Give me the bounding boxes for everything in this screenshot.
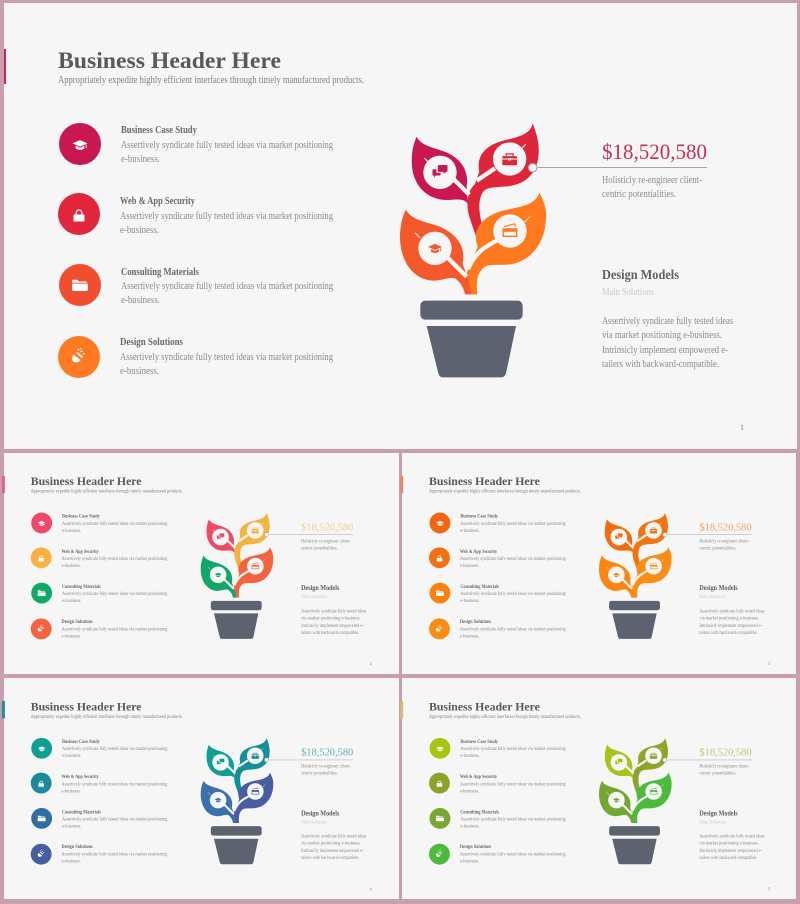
item: business case study: e-business. (460, 529, 480, 534)
design models heading: Design Models (301, 809, 340, 817)
item: consulting materials: e-business. (460, 599, 480, 604)
design models heading: Design Models (699, 584, 738, 592)
item: business case study: Assertively syndicate fully tested ideas via market positioning (460, 522, 566, 527)
plant in pot illustration (201, 513, 273, 639)
accent bar (4, 49, 6, 84)
item: web and app security (429, 547, 566, 569)
design models paragraph: via market positioning e-business. (602, 330, 722, 341)
price caption (602, 175, 702, 200)
item: design solutions: Design Solutions (460, 845, 491, 850)
item: consulting materials (59, 264, 333, 306)
price caption (301, 765, 351, 777)
main solutions subheading: Main Solutions (699, 595, 725, 600)
connector line (668, 759, 752, 761)
panel: slide 3 (402, 453, 796, 674)
slide 2 content (2, 476, 372, 666)
item: design solutions: Design Solutions (62, 620, 93, 625)
item: web and app security: Assertively syndicate fully tested ideas via market positioning (460, 783, 566, 788)
item: consulting materials: e-business. (62, 824, 81, 829)
item: design solutions: Assertively syndicate fully tested ideas via market positioning (460, 853, 566, 858)
title: Business Header Here (58, 48, 281, 73)
price caption (699, 765, 749, 777)
item: consulting materials (430, 583, 566, 604)
item: consulting materials: e-business. (62, 599, 81, 604)
item: web and app security: Web & App Security (460, 775, 498, 780)
item: design solutions: e-business. (460, 634, 479, 639)
item: consulting materials (430, 808, 566, 829)
item: consulting materials: Consulting Materials (460, 585, 499, 590)
item: consulting materials (31, 583, 168, 604)
design models paragraph: via market positioning e-business. (699, 842, 759, 847)
item: design solutions: e-business. (460, 860, 479, 865)
subtitle: Appropriately expedite highly efficient interfaces through timely manufactured products. (429, 715, 581, 720)
design models paragraph: Assertively syndicate fully tested ideas (699, 835, 765, 840)
accent bar (400, 476, 403, 493)
item: consulting materials: Assertively syndicate fully tested ideas via market positioning (460, 817, 566, 822)
item: business case study (31, 738, 168, 759)
design models heading: Design Models (699, 809, 738, 817)
design models paragraph: Intrinsicly implement empowered e- (301, 624, 364, 629)
item: business case study: Assertively syndicate fully tested ideas via market positioning (62, 522, 168, 527)
design models heading: Design Models (301, 584, 340, 592)
item: business case study: Assertively syndicate fully tested ideas via market positioning (460, 747, 566, 752)
item: consulting materials: Consulting Materials (62, 585, 101, 590)
item: design solutions: Design Solutions (120, 337, 183, 348)
item: design solutions: Design Solutions (460, 620, 491, 625)
panel: slide 5 (402, 678, 796, 899)
item: consulting materials: Assertively syndicate fully tested ideas via market positioning (460, 592, 566, 597)
item: design solutions (429, 618, 566, 639)
item: design solutions: e-business. (62, 634, 81, 639)
item: web and app security (58, 193, 333, 236)
item: design solutions: Design Solutions (62, 845, 93, 850)
item: web and app security: Web & App Security (120, 196, 195, 207)
item: design solutions: Assertively syndicate fully tested ideas via market positioning (460, 627, 566, 632)
item: design solutions (31, 844, 168, 865)
design models paragraph: tailers with backward-compatible. (699, 631, 758, 636)
design models heading: Design Models (602, 268, 679, 283)
item: design solutions (31, 618, 168, 639)
plant in pot illustration (599, 738, 672, 864)
design models paragraph: via market positioning e-business. (301, 842, 361, 847)
page number: 4 (370, 886, 372, 891)
design models paragraph (602, 316, 733, 370)
connector line (538, 166, 707, 168)
price caption: Holisticly re-engineer client- (602, 175, 702, 186)
main solutions subheading: Main Solutions (602, 287, 654, 298)
price caption: centric potentialities. (699, 772, 736, 777)
item: business case study (430, 738, 566, 759)
panel: slide 2 (4, 453, 399, 674)
price caption: Holisticly re-engineer client- (301, 765, 351, 770)
title: Business Header Here (429, 476, 540, 488)
design models paragraph (699, 609, 765, 636)
item: consulting materials: Assertively syndicate fully tested ideas via market positioning (121, 281, 333, 292)
item: web and app security: Web & App Security (62, 775, 99, 780)
main solutions subheading: Main Solutions (301, 820, 327, 825)
item: business case study (430, 513, 566, 534)
design models paragraph: tailers with backward-compatible. (699, 856, 758, 861)
price figure: $18,520,580 (602, 139, 707, 164)
price caption: centric potentialities. (301, 546, 338, 551)
connector line (269, 534, 353, 536)
slide 5 content (400, 701, 770, 891)
item: web and app security: Assertively syndicate fully tested ideas via market positioning (62, 557, 168, 562)
design models paragraph (699, 835, 765, 861)
title: Business Header Here (31, 701, 142, 713)
item: consulting materials: Assertively syndicate fully tested ideas via market positioning (62, 817, 168, 822)
subtitle: Appropriately expedite highly efficient interfaces through timely manufactured products. (31, 715, 183, 720)
page number: 1 (740, 423, 744, 432)
item: web and app security: Assertively syndicate fully tested ideas via market positioning (460, 557, 566, 562)
price caption: centric potentialities. (602, 189, 676, 200)
price caption (699, 539, 749, 551)
item: web and app security: Assertively syndicate fully tested ideas via market positioning (62, 783, 168, 788)
item: business case study (31, 513, 168, 534)
item: consulting materials: Consulting Materials (460, 810, 499, 815)
price caption: centric potentialities. (699, 546, 736, 551)
item: design solutions (429, 844, 566, 865)
accent bar (2, 476, 5, 493)
item: design solutions: e-business. (120, 366, 159, 377)
item: consulting materials: Assertively syndicate fully tested ideas via market positioning (62, 592, 168, 597)
item: business case study: Assertively syndicate fully tested ideas via market positioning (121, 140, 333, 151)
slide 1 content (4, 48, 744, 432)
item: web and app security: e-business. (120, 225, 159, 236)
accent bar (2, 701, 5, 718)
page number: 3 (768, 661, 770, 666)
plant in pot illustration (400, 123, 546, 377)
main solutions subheading: Main Solutions (301, 595, 327, 600)
item: consulting materials: Consulting Materials (62, 810, 101, 815)
panel: slide 4 (4, 678, 399, 899)
item: business case study: e-business. (460, 754, 480, 759)
connector line (269, 759, 353, 761)
item: web and app security: e-business. (460, 564, 479, 569)
item: business case study: Business Case Study (460, 515, 499, 520)
design models paragraph: Intrinsicly implement empowered e- (699, 624, 762, 629)
price caption: Holisticly re-engineer client- (699, 765, 749, 770)
item: business case study: Business Case Study (62, 740, 100, 745)
price figure: $18,520,580 (301, 521, 354, 533)
item: business case study (59, 123, 333, 165)
item: design solutions (58, 336, 333, 378)
item: design solutions: e-business. (62, 860, 81, 865)
subtitle: Appropriately expedite highly efficient interfaces through timely manufactured products. (31, 490, 183, 495)
design models paragraph: tailers with backward-compatible. (301, 631, 359, 636)
item: business case study: e-business. (62, 529, 81, 534)
item: web and app security: e-business. (62, 564, 81, 569)
item: business case study: Business Case Study (121, 125, 197, 136)
item: design solutions: Assertively syndicate fully tested ideas via market positioning (120, 352, 333, 363)
design models paragraph: Assertively syndicate fully tested ideas (699, 609, 765, 614)
subtitle: Appropriately expedite highly efficient interfaces through timely manufactured products. (58, 75, 364, 86)
price figure: $18,520,580 (699, 747, 752, 759)
design models paragraph: tailers with backward-compatible. (602, 359, 719, 370)
item: web and app security (31, 773, 168, 795)
plant in pot illustration (201, 738, 273, 864)
subtitle: Appropriately expedite highly efficient interfaces through timely manufactured products. (429, 490, 581, 495)
price caption: Holisticly re-engineer client- (699, 539, 749, 544)
price figure: $18,520,580 (699, 521, 752, 533)
accent bar (400, 701, 403, 718)
design models paragraph: Assertively syndicate fully tested ideas (602, 316, 733, 327)
title: Business Header Here (429, 701, 540, 713)
design models paragraph: via market positioning e-business. (699, 616, 759, 621)
item: web and app security (31, 547, 168, 569)
item: web and app security: e-business. (62, 790, 81, 795)
item: business case study: e-business. (62, 754, 81, 759)
item: business case study: Assertively syndicate fully tested ideas via market positioning (62, 747, 168, 752)
item: web and app security: Web & App Security (62, 550, 99, 555)
price caption: Holisticly re-engineer client- (301, 539, 351, 544)
price caption (301, 539, 351, 551)
item: web and app security: Web & App Security (460, 550, 498, 555)
plant in pot illustration (599, 513, 672, 639)
item: web and app security: Assertively syndicate fully tested ideas via market positioning (120, 211, 333, 222)
design models paragraph: Intrinsicly implement empowered e- (602, 345, 728, 356)
item: design solutions: Assertively syndicate fully tested ideas via market positioning (62, 853, 168, 858)
design models paragraph: Assertively syndicate fully tested ideas (301, 609, 366, 614)
item: consulting materials: e-business. (460, 824, 480, 829)
design models paragraph (301, 835, 366, 861)
design models paragraph: via market positioning e-business. (301, 616, 361, 621)
item: consulting materials (31, 808, 168, 829)
design models paragraph: Assertively syndicate fully tested ideas (301, 835, 366, 840)
slide 3 content (400, 476, 770, 666)
price caption: centric potentialities. (301, 772, 338, 777)
slide 4 content (2, 701, 372, 891)
item: business case study: Business Case Study (62, 515, 100, 520)
price figure: $18,520,580 (301, 747, 354, 759)
connector line (668, 534, 752, 536)
item: design solutions: Assertively syndicate fully tested ideas via market positioning (62, 627, 168, 632)
main solutions subheading: Main Solutions (699, 820, 725, 825)
design models paragraph: tailers with backward-compatible. (301, 856, 359, 861)
page number: 2 (370, 661, 372, 666)
design models paragraph (301, 609, 366, 636)
design models paragraph: Intrinsicly implement empowered e- (301, 849, 364, 854)
item: consulting materials: e-business. (121, 295, 160, 306)
title: Business Header Here (31, 476, 142, 488)
item: web and app security: e-business. (460, 790, 479, 795)
design models paragraph: Intrinsicly implement empowered e- (699, 849, 762, 854)
panel: main slide (4, 3, 797, 449)
item: web and app security (429, 773, 566, 795)
item: consulting materials: Consulting Materials (121, 267, 199, 278)
item: business case study: Business Case Study (460, 740, 499, 745)
item: business case study: e-business. (121, 154, 160, 165)
page number: 5 (768, 886, 770, 891)
